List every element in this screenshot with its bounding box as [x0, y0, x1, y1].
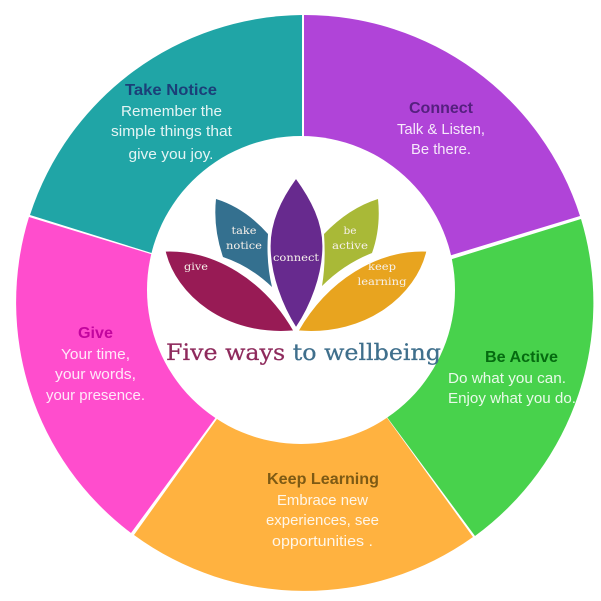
text: connect: Talk & Listen,: [397, 122, 485, 138]
text: connect: Be there.: [411, 142, 471, 158]
centre circle: [147, 136, 455, 444]
text: keep learning: Embrace new: [277, 493, 369, 509]
petal: be active: [322, 199, 379, 286]
label: be active: be: [344, 225, 356, 237]
text: keep learning: Keep Learning: [267, 471, 379, 488]
text: keep learning: experiences, see: [266, 513, 379, 529]
text: give: your words,: [55, 367, 136, 383]
text: be active: Do what you can.: [448, 371, 566, 387]
label: connect: connect: [273, 252, 320, 264]
text: take notice: Take Notice: [125, 82, 217, 99]
label: keep learning: learning: [358, 276, 407, 288]
text: keep learning: [266, 471, 379, 550]
lotus logo: [165, 178, 427, 332]
text: give: [46, 325, 145, 404]
text: connect: Connect: [409, 100, 473, 117]
segment: take notice: [30, 15, 302, 300]
label: take notice: notice: [226, 240, 262, 252]
text: connect: [397, 100, 485, 158]
segment: give: [16, 217, 302, 533]
petal: connect: [270, 178, 323, 328]
text: give: your presence.: [46, 388, 145, 404]
text: take notice: [111, 82, 232, 163]
label: take notice: take: [232, 225, 256, 237]
text: take notice: Remember the: [121, 104, 222, 120]
segment: connect: [304, 15, 580, 300]
petal: take notice: [215, 199, 272, 287]
text: take notice: simple things that: [111, 124, 232, 140]
label: be active: active: [332, 240, 368, 252]
text: give: Your time,: [61, 347, 130, 363]
label: keep learning: keep: [368, 261, 396, 273]
text: take notice: give you joy.: [128, 147, 214, 163]
label: give: give: [184, 261, 208, 273]
title: Five ways to wellbeing: [166, 341, 441, 366]
text: give: Give: [78, 325, 113, 342]
petal: keep learning: [298, 251, 427, 332]
segment: keep learning: [134, 300, 473, 591]
text: be active: [448, 349, 576, 407]
text: be active: Be Active: [485, 349, 558, 366]
segment: be active: [304, 219, 593, 536]
text: be active: Enjoy what you do.: [448, 391, 576, 407]
text: keep learning: opportunities .: [272, 534, 373, 550]
petal: give: [165, 251, 294, 332]
